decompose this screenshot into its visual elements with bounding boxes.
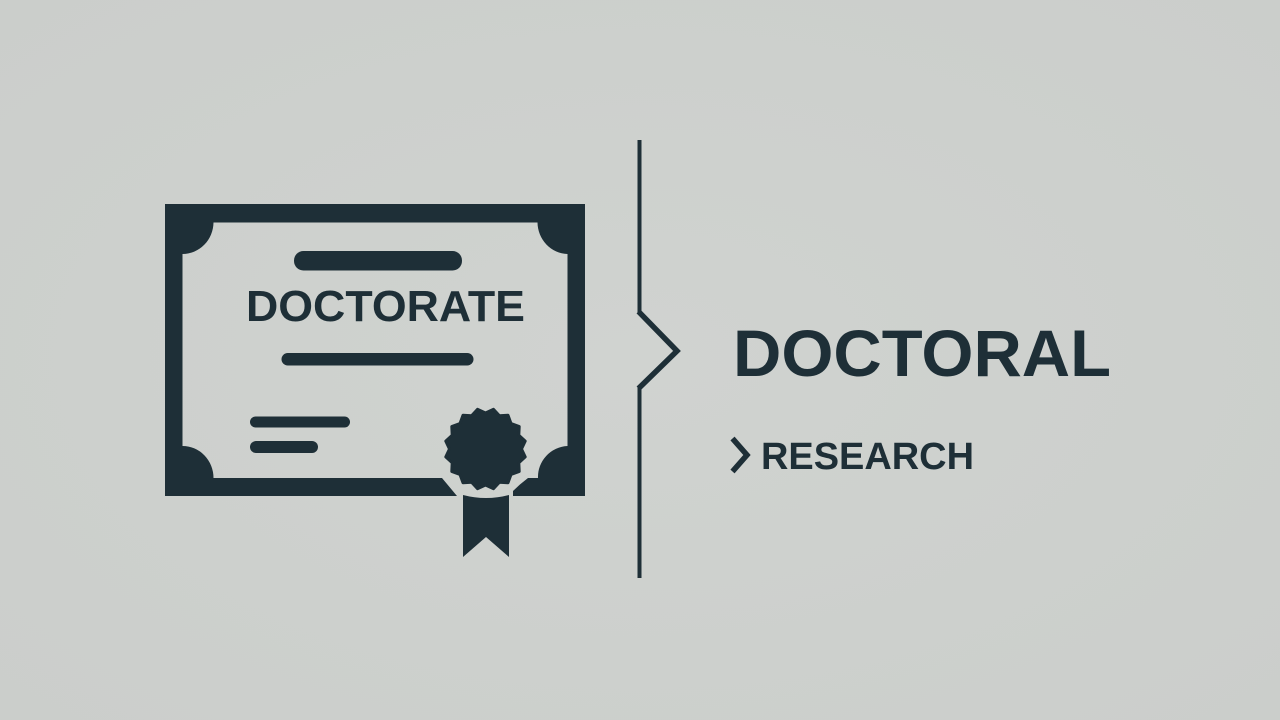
- icon: rosette seal: [446, 409, 525, 489]
- divider with chevron: [638, 140, 677, 578]
- heading: DOCTORAL: [733, 316, 1111, 390]
- icon: ribbon tails: [463, 495, 509, 557]
- certificate middle rule: [282, 353, 474, 366]
- label: research: RESEARCH: [761, 436, 974, 478]
- certificate word: DOCTORATE: [246, 282, 525, 331]
- certificate frame: [165, 204, 585, 496]
- certificate top rule: [294, 251, 462, 270]
- certificate small rule two: [250, 441, 318, 453]
- icon: small chevron: [732, 438, 747, 472]
- certificate small rule one: [250, 416, 350, 428]
- icon: doctorate certificate: [165, 204, 585, 557]
